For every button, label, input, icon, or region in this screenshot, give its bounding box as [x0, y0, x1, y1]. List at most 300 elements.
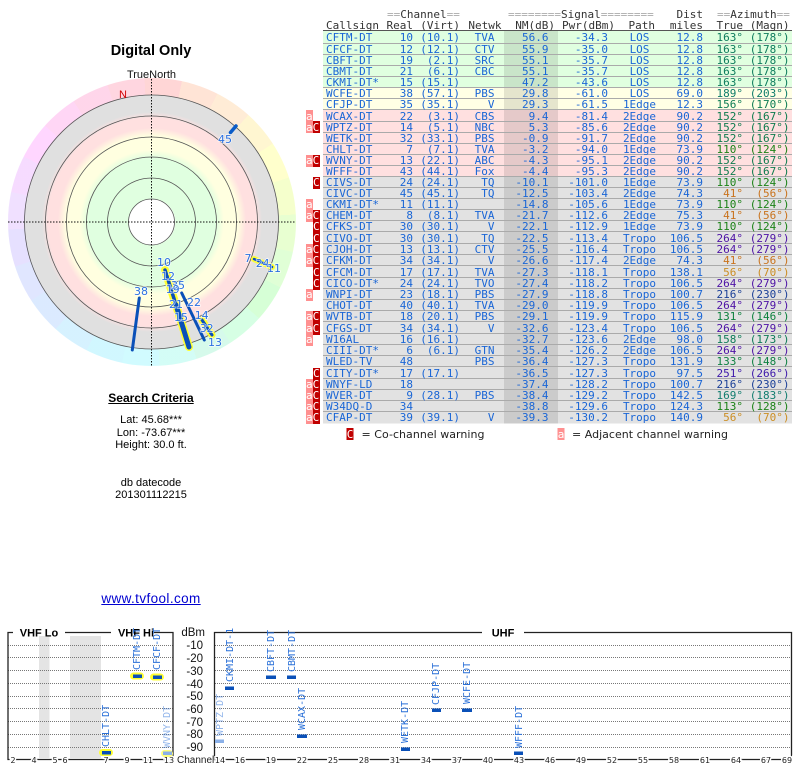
row: WLED-TV: WLED-TV — [326, 355, 373, 368]
row: WNPI-DT: WNPI-DT — [326, 288, 373, 301]
adjacent and co-channel warning flags: aC — [306, 243, 319, 256]
row: CHEM-DT: (56°) — [756, 209, 790, 222]
row: CFTM-DT: TVA — [475, 31, 495, 44]
row: CIVC-DT: TQ — [481, 187, 494, 200]
location details: Lon: -73.67*** — [117, 426, 185, 438]
row: WVER-DT: WVER-DT — [326, 389, 373, 402]
row: WVTB-DT: WVTB-DT — [326, 310, 373, 323]
row: CITY-DT*: 17 — [400, 367, 413, 380]
row: CBMT-DT: (6.1) — [427, 65, 460, 78]
row: CKMI-DT* 11: 73.9 — [676, 198, 703, 211]
station channel labels: 24 — [256, 257, 270, 270]
station channel labels: 21 — [169, 298, 183, 311]
row: WVTB-DT: 115.9 — [670, 310, 703, 323]
row: CIVS-DT: -10.1 — [515, 176, 548, 189]
station labels, rotated: CFTM-DT — [132, 628, 143, 670]
channel ticks: 11 — [143, 756, 153, 765]
title: Digital Only — [111, 43, 191, 59]
row: CFGS-DT: CFGS-DT — [326, 322, 373, 335]
row: CFCF-DT: 55.9 — [522, 43, 548, 56]
row: CHEM-DT: 2Edge — [623, 209, 656, 222]
band headings: UHF — [492, 628, 515, 640]
row: CFKM-DT: (56°) — [756, 254, 790, 267]
row: CFCF-DT: 163° — [716, 43, 743, 56]
row: WCFE-DT: 189° — [716, 87, 743, 100]
row: WVER-DT: 142.5 — [670, 389, 703, 402]
row: CFKS-DT: V — [488, 220, 495, 233]
row: WVTB-DT: Tropo — [623, 310, 656, 323]
row: CFCF-DT: (12.1) — [420, 43, 460, 56]
row: CIVS-DT: 110° — [716, 176, 743, 189]
row: CFCF-DT: (178°) — [750, 43, 790, 56]
station labels, rotated: WCAX-DT — [297, 688, 308, 730]
adjacent and co-channel warning flags: a — [306, 288, 313, 301]
row: CFKS-DT: CFKS-DT — [326, 220, 373, 233]
row: WLED-TV: -127.3 — [568, 355, 608, 368]
channel ticks: 49 — [576, 756, 586, 765]
row: CIVC-DT: -12.5 — [515, 187, 548, 200]
row: CITY-DT*: Tropo — [623, 367, 656, 380]
row: CFTM-DT: 10 — [400, 31, 413, 44]
row: WNYF-LD: 216° — [716, 378, 743, 391]
row: CFGS-DT: (34.1) — [420, 322, 460, 335]
row: CIII-DT*: CIII-DT* — [326, 344, 379, 357]
search criteria heading: Search Criteria — [108, 391, 194, 405]
row: CICO-DT*: 264° — [716, 277, 743, 290]
row: CFTM-DT: LOS — [630, 31, 649, 44]
row: CBMT-DT: LOS — [630, 65, 649, 78]
row: CIII-DT*: 6 — [406, 344, 413, 357]
row: CHEM-DT: TVA — [475, 209, 495, 222]
row: CHOT-DT: -29.0 — [515, 299, 548, 312]
row: WVTB-DT: PBS — [475, 310, 494, 323]
row: WCAX-DT: 90.2 — [676, 110, 703, 123]
row: WVNY-DT: -95.1 — [575, 154, 608, 167]
row: CFCM-DT: (17.1) — [420, 266, 460, 279]
row: CIVS-DT: 73.9 — [676, 176, 703, 189]
row: WVTB-DT: (20.1) — [420, 310, 460, 323]
row: CHOT-DT: TVA — [475, 299, 495, 312]
row: CFTM-DT: 12.8 — [676, 31, 703, 44]
row: WFFF-DT: (167°) — [750, 165, 790, 178]
row: CICO-DT*: (279°) — [750, 277, 790, 290]
channel ticks: 69 — [782, 756, 792, 765]
row: CFKS-DT: -112.9 — [568, 220, 608, 233]
row: CFJP-DT: 29.3 — [522, 98, 548, 111]
row: CBFT-DT: 12.8 — [676, 54, 703, 67]
row: CKMI-DT* 15: 163° — [716, 76, 743, 89]
row: W16AL: (173°) — [750, 333, 790, 346]
row: CIII-DT*: 106.5 — [670, 344, 703, 357]
table header: == — [717, 8, 731, 21]
adjacent and co-channel warning flags: aC — [306, 154, 319, 167]
row: CHEM-DT: -21.7 — [515, 209, 548, 222]
station channel labels: 12 — [161, 270, 175, 283]
station labels, rotated: WETK-DT — [400, 701, 411, 743]
table header: True — [716, 19, 743, 32]
row: WCFE-DT: WCFE-DT — [326, 87, 373, 100]
channel ticks: 61 — [700, 756, 710, 765]
row: CICO-DT*: 24 — [400, 277, 413, 290]
row: CICO-DT*: -27.4 — [515, 277, 549, 290]
row: W16AL: 98.0 — [676, 333, 703, 346]
row: WNPI-DT: PBS — [475, 288, 494, 301]
row: WVNY-DT: ABC — [475, 154, 494, 167]
row: CKMI-DT* 15: -43.6 — [575, 76, 608, 89]
row: CFAP-DT: -39.3 — [515, 411, 548, 424]
row: WVNY-DT: (22.1) — [420, 154, 460, 167]
row: WLED-TV: -36.4 — [515, 355, 549, 368]
row: CFGS-DT: 106.5 — [670, 322, 703, 335]
row: WCFE-DT: 69.0 — [676, 87, 703, 100]
row: CJOH-DT: -25.5 — [515, 243, 548, 256]
row: W16AL: 16 — [400, 333, 413, 346]
row: WFFF-DT: -4.4 — [522, 165, 549, 178]
band headings: VHF Lo — [20, 628, 59, 640]
row: WCFE-DT: (203°) — [750, 87, 790, 100]
row: CIVO-DT: 264° — [716, 232, 743, 245]
row: CIII-DT*: (279°) — [750, 344, 790, 357]
row: CHEM-DT: CHEM-DT — [326, 209, 373, 222]
row: CHOT-DT: (40.1) — [420, 299, 460, 312]
row: CFAP-DT: -130.2 — [568, 411, 608, 424]
row: CFJP-DT: 35 — [400, 98, 413, 111]
adjacent and co-channel warning flags: C — [313, 266, 320, 279]
row: CKMI-DT* 11: 110° — [716, 198, 743, 211]
row: CBMT-DT: 12.8 — [676, 65, 703, 78]
row: CFCM-DT: -27.3 — [515, 266, 548, 279]
row: CIVO-DT: (279°) — [750, 232, 790, 245]
row: WVER-DT: 169° — [716, 389, 743, 402]
channel ticks: 16 — [235, 756, 245, 765]
row: CIVO-DT: (30.1) — [420, 232, 460, 245]
row: CFTM-DT: -34.3 — [575, 31, 608, 44]
adjacent and co-channel warning flags: C — [313, 277, 320, 290]
row: CJOH-DT: (279°) — [750, 243, 790, 256]
adjacent and co-channel warning flags: C — [313, 176, 320, 189]
row: CFKS-DT: (30.1) — [420, 220, 460, 233]
station channel labels: 10 — [157, 256, 171, 269]
row: CITY-DT*: -36.5 — [515, 367, 548, 380]
row: W34DQ-D: 34 — [400, 400, 413, 413]
station channel labels: 35 — [171, 279, 185, 292]
row: CICO-DT*: TVO — [475, 277, 494, 290]
row: WETK-DT: 2Edge — [623, 132, 656, 145]
adjacent and co-channel warning flags: aC — [306, 389, 319, 402]
row: CFKS-DT: 73.9 — [676, 220, 703, 233]
channel ticks: 37 — [452, 756, 462, 765]
row: CIVO-DT: TQ — [481, 232, 494, 245]
row: CFAP-DT: CFAP-DT — [326, 411, 373, 424]
row: WCAX-DT: -81.4 — [575, 110, 608, 123]
true north label: TrueNorth — [127, 69, 176, 81]
row: W16AL: W16AL — [326, 333, 359, 346]
row: CHOT-DT: (279°) — [750, 299, 790, 312]
row: W16AL: -123.6 — [568, 333, 608, 346]
row: CJOH-DT: CJOH-DT — [326, 243, 373, 256]
row: WPTZ-DT: 90.2 — [676, 121, 703, 134]
legend: adjacent channel warning: a — [558, 428, 564, 441]
row: WVNY-DT: 13 — [400, 154, 413, 167]
row: WNPI-DT: (230°) — [750, 288, 790, 301]
station channel labels: 45 — [218, 133, 232, 146]
channel ticks: 13 — [164, 756, 174, 765]
row: WVER-DT: -38.4 — [515, 389, 549, 402]
row: CFCM-DT: Tropo — [623, 266, 656, 279]
UHF frame — [214, 632, 792, 760]
row: CFKM-DT: 74.3 — [676, 254, 703, 267]
row: CFKS-DT: 110° — [716, 220, 743, 233]
row: CFTM-DT: (10.1) — [420, 31, 460, 44]
row: CKMI-DT* 11: 11 — [400, 198, 413, 211]
channel ticks: 55 — [638, 756, 648, 765]
adjacent and co-channel warning flags: aC — [306, 310, 319, 323]
row: CBFT-DT: CBFT-DT — [326, 54, 373, 67]
row: CHEM-DT: 8 — [406, 209, 413, 222]
row: WNYF-LD: Tropo — [623, 378, 656, 391]
table header: (Virt) — [420, 19, 460, 32]
row: WVTB-DT: -119.9 — [568, 310, 608, 323]
row: CFTM-DT: 56.6 — [522, 31, 548, 44]
table header — [326, 8, 790, 32]
channel ticks: 19 — [266, 756, 276, 765]
row: CKMI-DT* 15: (178°) — [750, 76, 790, 89]
legend: co-channel warning: C — [347, 428, 353, 441]
row: CFTM-DT: 163° — [716, 31, 743, 44]
row: CITY-DT*: (17.1) — [420, 367, 460, 380]
signal strength bands — [24, 95, 278, 349]
row: CBFT-DT: 19 — [400, 54, 413, 67]
row: CFJP-DT: (170°) — [750, 98, 790, 111]
row: CFKM-DT: (34.1) — [420, 254, 460, 267]
row: WVNY-DT: (167°) — [750, 154, 790, 167]
row: CHLT-DT: 7 — [406, 143, 413, 156]
legend: adjacent channel warning: = Adjacent channel warning — [572, 428, 728, 441]
row: CBFT-DT: (2.1) — [427, 54, 460, 67]
row: CKMI-DT* 11: CKMI-DT* — [326, 198, 379, 211]
row: CIII-DT*: 264° — [716, 344, 743, 357]
row: WCAX-DT: (167°) — [750, 110, 790, 123]
channel ticks: 28 — [359, 756, 369, 765]
row: CHOT-DT: 264° — [716, 299, 743, 312]
row: CITY-DT*: (266°) — [750, 367, 790, 380]
row: WCFE-DT: 29.8 — [522, 87, 548, 100]
row: WLED-TV: 131.9 — [670, 355, 703, 368]
channel ticks: 7 — [103, 756, 109, 765]
row: WETK-DT: 90.2 — [676, 132, 703, 145]
row: CHLT-DT: 1Edge — [623, 143, 656, 156]
dBm axis: -10 — [186, 640, 203, 652]
row: WFFF-DT: -95.3 — [575, 165, 608, 178]
row: CIVO-DT: 106.5 — [670, 232, 703, 245]
VHF frame — [8, 632, 173, 760]
db datecode: db datecode — [121, 477, 181, 489]
row: CFCF-DT: 12 — [400, 43, 413, 56]
row: CBMT-DT: -35.7 — [575, 65, 608, 78]
row: CIII-DT*: -35.4 — [515, 344, 549, 357]
row: CJOH-DT: 106.5 — [670, 243, 703, 256]
location details: Height: 30.0 ft. — [115, 439, 187, 451]
row: WPTZ-DT: 14 — [400, 121, 413, 134]
dBm axis: -20 — [186, 653, 203, 665]
band headings — [20, 628, 515, 640]
row: CFCF-DT: -35.0 — [575, 43, 608, 56]
station bars — [132, 126, 272, 350]
station channel labels: 15 — [174, 311, 188, 324]
station channel labels: 13 — [208, 336, 222, 349]
row: CHLT-DT: -3.2 — [522, 143, 548, 156]
row: CHLT-DT: CHLT-DT — [326, 143, 373, 156]
station channel labels: 19 — [166, 283, 180, 296]
row: WPTZ-DT: NBC — [475, 121, 494, 134]
row: CHOT-DT: -119.9 — [568, 299, 608, 312]
table header: Signal======== — [561, 8, 654, 21]
channel ticks: 67 — [761, 756, 771, 765]
row: CFGS-DT: Tropo — [623, 322, 656, 335]
row: CBMT-DT: 163° — [716, 65, 743, 78]
channel ticks: 58 — [669, 756, 679, 765]
row: CFKS-DT: 30 — [400, 220, 413, 233]
row: WVNY-DT: -4.3 — [522, 154, 548, 167]
channel ticks: 43 — [514, 756, 524, 765]
radar chart: azimuth polar plot — [8, 78, 296, 366]
row: WVNY-DT: 152° — [716, 154, 743, 167]
row: CFKS-DT: 1Edge — [623, 220, 656, 233]
row: CHOT-DT: 106.5 — [670, 299, 703, 312]
row: CIII-DT*: (6.1) — [427, 344, 460, 357]
row: CIVO-DT: -22.5 — [515, 232, 548, 245]
dBm axis — [177, 627, 214, 766]
row: WETK-DT: -0.9 — [522, 132, 548, 145]
adjacent and co-channel warning flags: aC — [306, 121, 319, 134]
row: WNYF-LD: WNYF-LD — [326, 378, 372, 391]
row: WFFF-DT: 2Edge — [623, 165, 656, 178]
channel ticks: 64 — [731, 756, 741, 765]
row: CIVS-DT: (24.1) — [420, 176, 460, 189]
row: WCAX-DT: WCAX-DT — [326, 110, 373, 123]
row: W34DQ-D: -38.8 — [515, 400, 548, 413]
row: CFCM-DT: 138.1 — [670, 266, 703, 279]
station labels, rotated: CFCF-DT — [152, 628, 163, 670]
row: WCAX-DT: 22 — [400, 110, 413, 123]
table header: Real — [386, 19, 413, 32]
row: WNPI-DT: 100.7 — [670, 288, 703, 301]
row: CBFT-DT: (178°) — [750, 54, 790, 67]
row: WCFE-DT: -61.0 — [575, 87, 608, 100]
table header: Netwk — [468, 19, 502, 32]
table header: Azimuth== — [730, 8, 790, 21]
row: CHLT-DT: TVA — [475, 143, 495, 156]
adjacent and co-channel warning flags: C — [313, 220, 320, 233]
row: W16AL: 158° — [716, 333, 743, 346]
row: CBFT-DT: 163° — [716, 54, 743, 67]
row: CKMI-DT* 11: -14.8 — [515, 198, 548, 211]
row: W34DQ-D: (128°) — [750, 400, 790, 413]
row: CBMT-DT: (178°) — [750, 65, 790, 78]
row: CKMI-DT* 11: -105.6 — [568, 198, 608, 211]
row: WNPI-DT: 216° — [716, 288, 743, 301]
row: CIVS-DT: 24 — [400, 176, 413, 189]
row: CFKM-DT: -26.6 — [515, 254, 548, 267]
row: WVER-DT: -129.2 — [568, 389, 608, 402]
row: CFKM-DT: 41° — [723, 254, 743, 267]
row: W16AL: 2Edge — [623, 333, 656, 346]
row: WNYF-LD: -37.4 — [515, 378, 549, 391]
channel ticks: 22 — [297, 756, 307, 765]
row: CFTM-DT: (178°) — [750, 31, 790, 44]
row: CBMT-DT: CBMT-DT — [326, 65, 373, 78]
adjacent and co-channel warning flags: aC — [306, 400, 319, 413]
table header: == — [387, 8, 401, 21]
table header: Channel== — [400, 8, 460, 21]
row: CFJP-DT: 1Edge — [623, 98, 656, 111]
row: CIVS-DT: 1Edge — [623, 176, 656, 189]
row: CICO-DT*: (24.1) — [420, 277, 460, 290]
row: WLED-TV: Tropo — [623, 355, 656, 368]
row: CFCM-DT: (70°) — [756, 266, 790, 279]
row: CBFT-DT: -35.7 — [575, 54, 608, 67]
row: WFFF-DT: 90.2 — [676, 165, 703, 178]
row: CKMI-DT* 11: (124°) — [750, 198, 790, 211]
row: CFGS-DT: (279°) — [750, 322, 790, 335]
table header: Pwr(dBm) — [562, 19, 615, 32]
row: WFFF-DT: 152° — [716, 165, 743, 178]
row: CBMT-DT: CBC — [475, 65, 494, 78]
adjacent and co-channel warning flags: C — [313, 232, 320, 245]
row: CFKM-DT: 2Edge — [623, 254, 656, 267]
row: WVTB-DT: -29.1 — [515, 310, 548, 323]
dBm axis: -60 — [186, 704, 203, 716]
row: WNYF-LD: (230°) — [750, 378, 790, 391]
row: CHLT-DT: (124°) — [750, 143, 790, 156]
row: CIVS-DT: -101.0 — [568, 176, 608, 189]
row: WETK-DT: 32 — [400, 132, 413, 145]
row: CJOH-DT: 264° — [716, 243, 743, 256]
station labels, rotated: WCFE-DT — [462, 662, 473, 704]
table header: NM(dB) — [515, 19, 555, 32]
row: WCAX-DT: (3.1) — [427, 110, 460, 123]
row: CHOT-DT: 40 — [400, 299, 413, 312]
search criteria — [108, 391, 194, 501]
row: WNPI-DT: -118.8 — [568, 288, 608, 301]
row: CIVS-DT: TQ — [481, 176, 494, 189]
row: CHLT-DT: 73.9 — [676, 143, 703, 156]
row: W16AL: -32.7 — [515, 333, 548, 346]
row: WVTB-DT: (146°) — [750, 310, 790, 323]
adjacent and co-channel warning flags: a — [306, 333, 313, 346]
row: CJOH-DT: (13.1) — [420, 243, 460, 256]
station labels, rotated: CBMT-DT — [287, 630, 298, 672]
row: W34DQ-D: -129.6 — [568, 400, 608, 413]
adjacent and co-channel warning flags: a — [306, 110, 313, 123]
row: WETK-DT: WETK-DT — [326, 132, 373, 145]
row: CIVO-DT: 30 — [400, 232, 413, 245]
dBm axis: -50 — [186, 691, 203, 703]
row: CHLT-DT: -94.0 — [575, 143, 608, 156]
outer azimuth colour ring — [8, 78, 296, 366]
row: CBFT-DT: 55.1 — [522, 54, 548, 67]
station labels, rotated: CBFT-DT — [266, 630, 277, 672]
channel ticks: 34 — [421, 756, 431, 765]
row: CFCF-DT: LOS — [630, 43, 649, 56]
row: WNPI-DT: -27.9 — [515, 288, 548, 301]
row: CJOH-DT: CTV — [475, 243, 495, 256]
row: W34DQ-D: Tropo — [623, 400, 656, 413]
row: WETK-DT: 152° — [716, 132, 743, 145]
adjacent and co-channel warning flags: C — [313, 367, 320, 380]
row: WETK-DT: -91.7 — [575, 132, 608, 145]
row: CFCF-DT: 12.8 — [676, 43, 703, 56]
